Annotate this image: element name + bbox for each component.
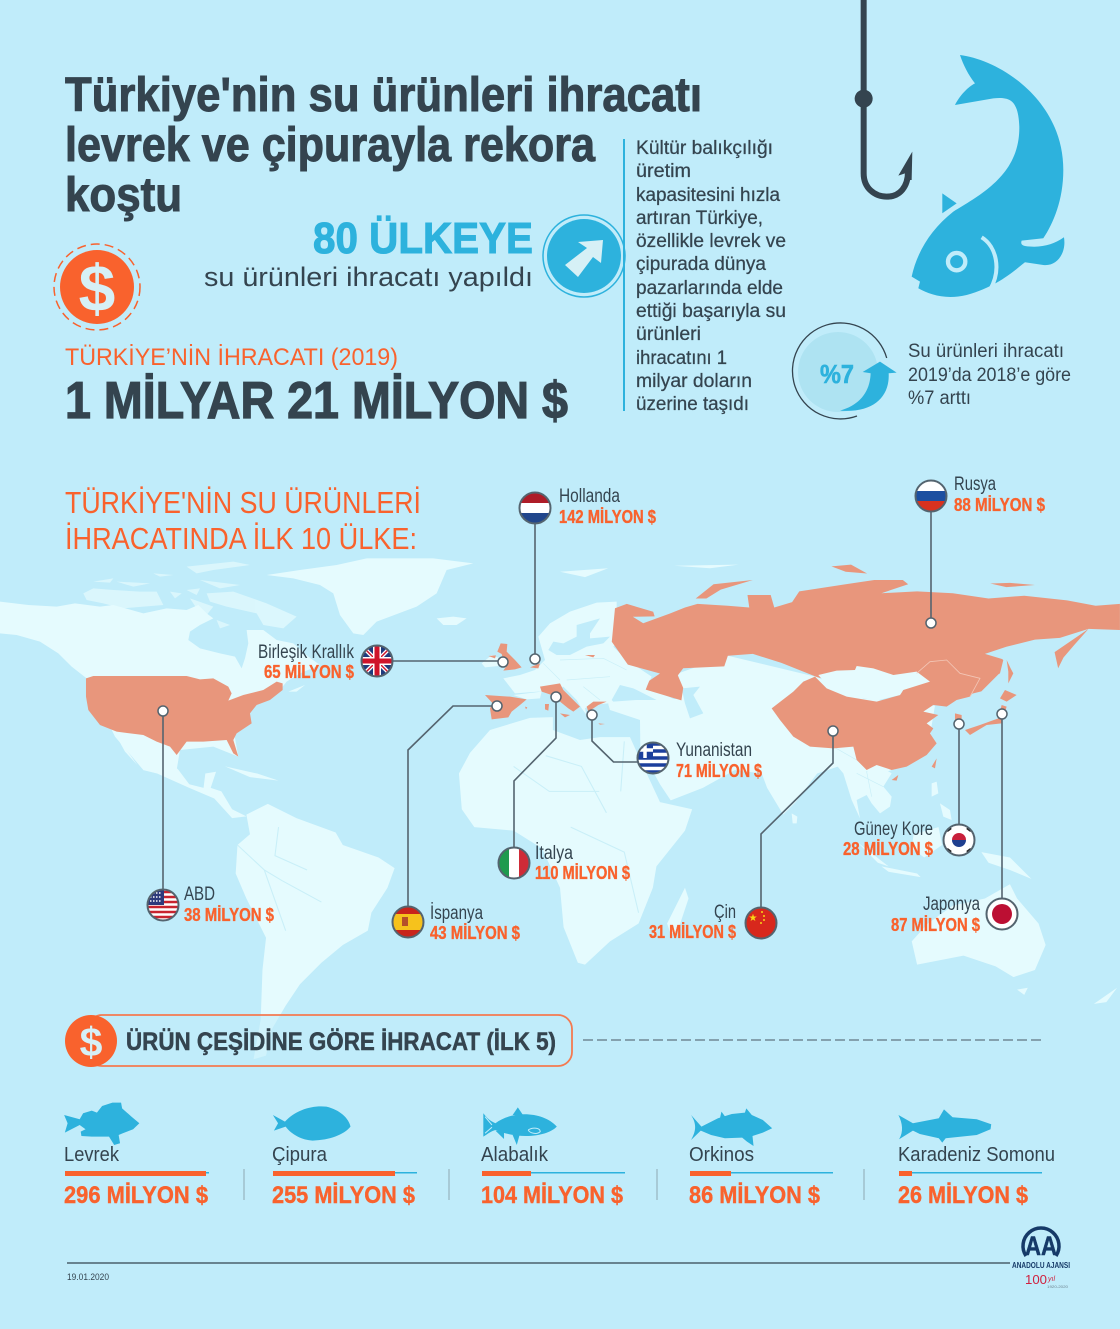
islands: Russian arctic and far east	[696, 565, 1089, 668]
country: China	[772, 653, 1003, 770]
map: Europe land and inland seas	[482, 602, 703, 718]
map: Canadian arctic islands	[83, 562, 297, 628]
callout: Netherlands: 142 MİLYON $	[559, 507, 656, 527]
callout: China: ★	[749, 913, 758, 924]
text block: aquaculture paragraph: üzerine taşıdı	[636, 394, 749, 415]
title: koştu	[65, 169, 182, 222]
callout: USA: 38 MİLYON $	[184, 905, 274, 925]
product: Orkinos: 86 MİLYON $	[689, 1182, 821, 1209]
text block: aquaculture paragraph: ettiği başarıyla su	[636, 301, 786, 322]
callout: 80 countries: 80 ÜLKEYE	[313, 214, 533, 263]
text block: aquaculture paragraph: çipurada dünya	[636, 254, 766, 275]
callout: USA: ABD	[184, 884, 215, 905]
icon: fishing hook	[855, 0, 912, 197]
text block: aquaculture paragraph: Kültür balıkçılığı	[636, 138, 773, 159]
callout: 80 countries	[204, 214, 533, 292]
callout: Netherlands: Hollanda	[559, 486, 620, 507]
title: Türkiye'nin su ürünleri ihracatı	[65, 69, 702, 122]
chart: 7 percent growth: %7	[820, 359, 854, 389]
title: levrek ve çipurayla rekora	[65, 119, 595, 172]
icon: blue fish	[912, 55, 1064, 297]
icon: dollar coin: $	[79, 251, 115, 325]
country: Lithuania strip	[585, 655, 595, 657]
callout: Russia: 88 MİLYON $	[954, 495, 1045, 515]
icon: dollar coin	[54, 244, 140, 330]
map: highlighted countries	[86, 565, 1120, 781]
section heading: exports by product: $	[80, 1019, 103, 1065]
product: Levrek: Levrek	[64, 1144, 120, 1166]
map: Asia, Africa and Oceania	[459, 565, 1117, 1004]
callout: Netherlands	[519, 486, 656, 664]
callout: Russia: Rusya	[954, 474, 996, 495]
country: Greece	[587, 702, 607, 725]
title	[65, 69, 702, 222]
callout: Spain: İspanya	[430, 903, 483, 924]
logo: Anadolu Ajansi: AA	[1025, 1231, 1057, 1261]
callout: Italy: 110 MİLYON $	[535, 863, 630, 883]
country: Netherlands	[530, 663, 540, 668]
heading: top 10 countries	[65, 485, 421, 556]
callout: Greece: Yunanistan	[676, 740, 752, 761]
text block: aquaculture paragraph: ürünleri	[636, 324, 701, 345]
product: Karadeniz Somonu	[898, 1109, 1055, 1209]
callout: Spain	[392, 701, 520, 943]
section heading: exports by product	[65, 1015, 1043, 1067]
callout: USA	[147, 706, 274, 925]
export total: 1 MİLYAR 21 MİLYON $	[65, 372, 568, 430]
export total: TÜRKİYE’NİN İHRACATI (2019)	[65, 344, 398, 371]
countries: Western Europe	[485, 643, 607, 725]
callout: United Kingdom	[258, 642, 508, 682]
product: Alabalık	[481, 1107, 625, 1209]
product: Karadeniz Somonu: 26 MİLYON $	[898, 1182, 1029, 1209]
product: Orkinos	[689, 1108, 833, 1209]
text block: aquaculture paragraph: milyar doların	[636, 371, 752, 392]
islands: Japan and Sakhalin	[965, 660, 1017, 735]
divider	[656, 1169, 658, 1200]
product: Alabalık: 104 MİLYON $	[481, 1182, 624, 1209]
text block: aquaculture paragraph: artıran Türkiye,	[636, 208, 763, 229]
callout: 80 countries: su ürünleri ihracatı yapıldı	[204, 262, 533, 292]
callout: Greece: 71 MİLYON $	[676, 761, 762, 781]
export total	[65, 344, 568, 430]
map: Southeast Asia land	[792, 747, 952, 823]
country: Italy	[540, 683, 580, 717]
product: Çipura: 255 MİLYON $	[272, 1182, 416, 1209]
chart: 7 percent growth	[792, 323, 897, 419]
text block: aquaculture paragraph: ihracatını 1	[636, 348, 727, 369]
callout: Italy: İtalya	[535, 843, 573, 864]
divider	[863, 1169, 865, 1200]
logo: Anadolu Ajansi: yıl	[1047, 1276, 1055, 1283]
callout: South Korea: 28 MİLYON $	[843, 839, 933, 859]
callout: China: 31 MİLYON $	[649, 922, 736, 942]
country: Spain	[485, 695, 527, 719]
country: South Korea, Taiwan and Hainan	[892, 713, 962, 781]
world map	[0, 558, 1120, 1059]
callout: South Korea: Güney Kore	[854, 819, 933, 840]
product: Çipura	[272, 1106, 417, 1209]
logo: Anadolu Ajansi: 100	[1025, 1272, 1047, 1287]
country: Mongolia cut-out	[818, 666, 930, 701]
callout: South Korea	[843, 719, 975, 859]
text block: growth note: %7 arttı	[908, 388, 971, 409]
callout: Spain: 43 MİLYON $	[430, 923, 520, 943]
product: Çipura: Çipura	[272, 1144, 328, 1166]
callout: United Kingdom: Birleşik Krallık	[258, 642, 354, 663]
callout: Japan	[891, 709, 1018, 935]
date: 19.01.2020	[67, 1272, 109, 1282]
map: Central and South America	[143, 766, 395, 1059]
callout: United Kingdom: 65 MİLYON $	[264, 662, 354, 682]
text block: aquaculture paragraph: özellikle levrek ve	[636, 231, 786, 252]
callout: Russia	[915, 474, 1045, 628]
product: Karadeniz Somonu: Karadeniz Somonu	[898, 1144, 1055, 1166]
text block: growth note: 2019’da 2018’e göre	[908, 365, 1071, 386]
callout: Japan: 87 MİLYON $	[891, 915, 980, 935]
map: North America and Greenland	[0, 558, 473, 770]
product: Levrek: 296 MİLYON $	[64, 1182, 209, 1209]
text block: aquaculture paragraph: pazarlarında elde	[636, 278, 783, 299]
country: United Kingdom	[488, 643, 522, 671]
callout: China	[649, 726, 838, 942]
country: Russia	[612, 580, 1120, 700]
logo: Anadolu Ajansi: ANADOLU AJANSI	[1012, 1260, 1070, 1270]
heading: top 10 countries: TÜRKİYE'NİN SU ÜRÜNLERİ	[65, 485, 421, 520]
text block: aquaculture paragraph: üretim	[636, 161, 691, 182]
callout: Japan: Japonya	[923, 894, 980, 915]
divider	[448, 1169, 450, 1200]
section heading: exports by product: ÜRÜN ÇEŞİDİNE GÖRE İHRACAT (İLK 5)	[126, 1027, 556, 1056]
product: Orkinos: Orkinos	[689, 1144, 754, 1166]
text block: aquaculture paragraph	[623, 138, 786, 415]
product: Alabalık: Alabalık	[481, 1144, 549, 1166]
icon: arrow circle	[543, 215, 625, 297]
text block: growth note	[908, 341, 1071, 409]
divider	[243, 1169, 245, 1200]
product: Levrek	[64, 1103, 209, 1209]
footer line	[67, 1262, 1010, 1264]
border: Russia-China	[917, 660, 980, 697]
text block: growth note: Su ürünleri ihracatı	[908, 341, 1064, 362]
logo: Anadolu Ajansi	[1012, 1228, 1070, 1289]
callout: Italy	[498, 692, 630, 883]
logo: Anadolu Ajansi: 1920-2020	[1047, 1284, 1069, 1289]
heading: top 10 countries: İHRACATINDA İLK 10 ÜLKE:	[65, 521, 417, 556]
callout: China: Çin	[714, 902, 736, 923]
country: United States	[86, 676, 283, 757]
callout: Greece	[587, 710, 762, 781]
text block: aquaculture paragraph: kapasitesini hızla	[636, 185, 780, 206]
